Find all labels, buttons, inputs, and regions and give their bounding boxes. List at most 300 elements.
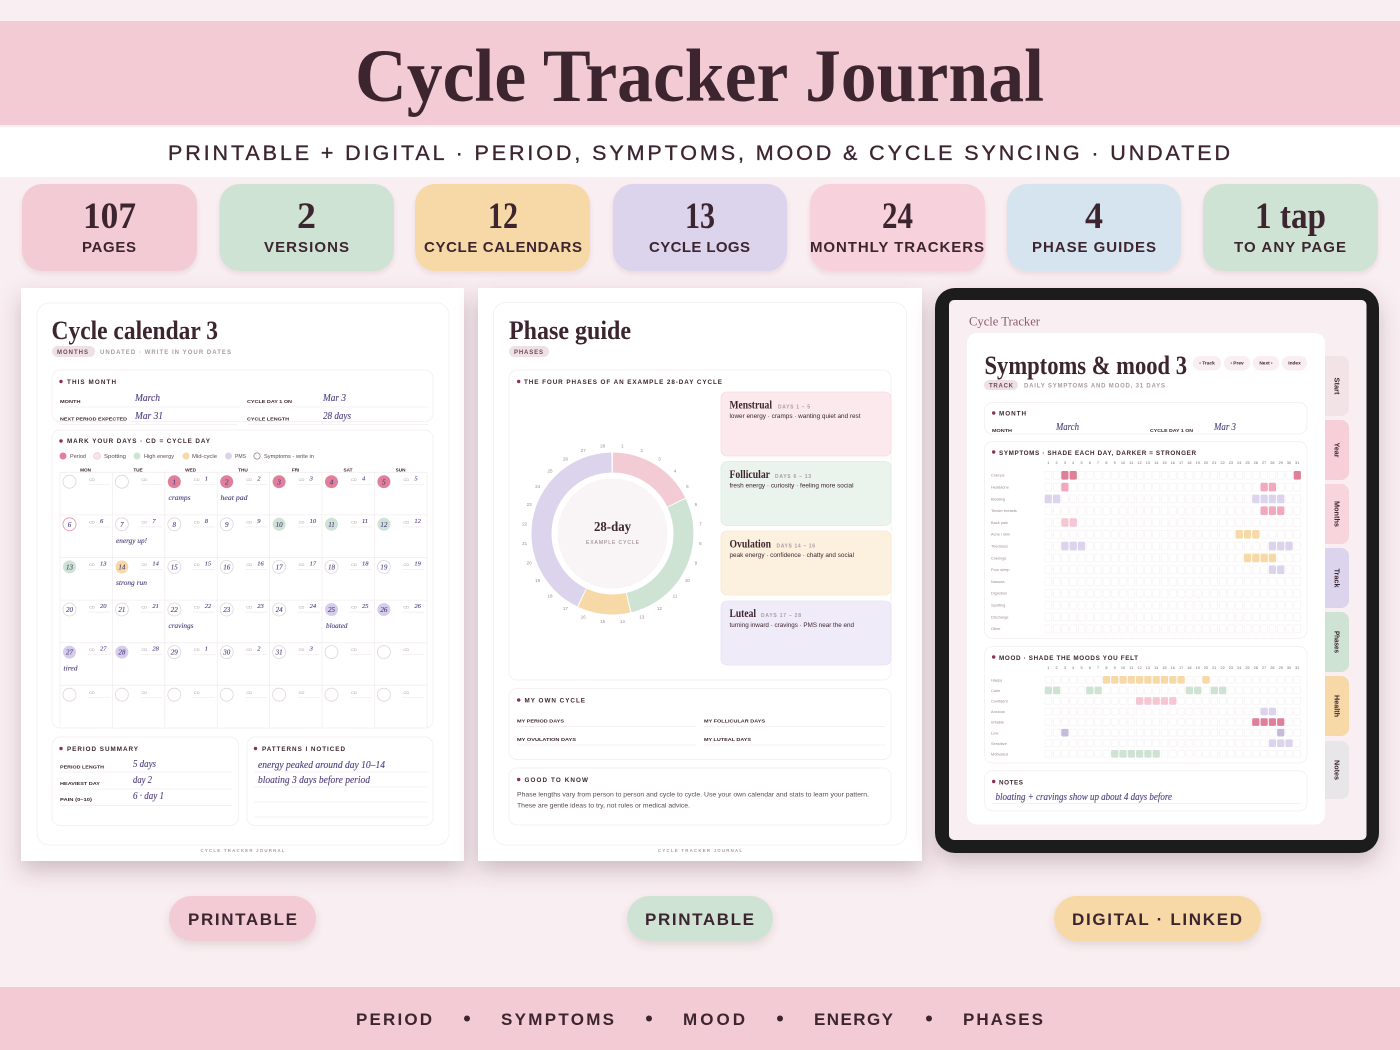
calendar week 3: CD — [141, 562, 147, 567]
calendar week 2: CD — [403, 519, 409, 524]
donut day labels: 20 — [527, 560, 532, 565]
calendar week 1: 1 — [205, 475, 208, 482]
side navigation tabs: Health — [1332, 695, 1340, 717]
panel: this month: March — [134, 393, 160, 404]
panel: notes: NOTES — [999, 780, 1023, 786]
calendar week 3: 14 — [152, 560, 160, 568]
panel: period summary: 6 · day 1 — [133, 791, 164, 802]
footer keywords: PERIOD — [356, 1010, 432, 1029]
donut day labels: 18 — [547, 594, 553, 599]
calendar week 2: 12 — [414, 518, 422, 525]
side navigation tabs: Year — [1332, 442, 1340, 458]
weekday headings: MON — [80, 468, 92, 472]
footer keywords — [356, 1010, 1043, 1029]
stat: 12 cycle calendars — [415, 184, 590, 271]
calendar legend: Mid-cycle — [192, 454, 217, 460]
calendar week 1: cramps — [168, 493, 191, 502]
panel: my own cycle — [509, 688, 891, 760]
calendar week 2: 11 — [362, 518, 368, 525]
panel: four phases — [509, 370, 891, 680]
symptoms day numbers: 8 — [1105, 461, 1107, 465]
calendar week 4: 24 — [276, 606, 283, 614]
mood day numbers: 14 — [1154, 666, 1158, 670]
calendar week 5: CD — [194, 647, 200, 652]
heading: symptoms and mood 3: Symptoms & mood 3 — [984, 351, 1187, 380]
symptoms row labels: Tender breasts — [991, 508, 1017, 513]
title band — [0, 21, 1400, 125]
tag: phases: PHASES — [514, 350, 543, 356]
calendar week 1: 4 — [362, 475, 366, 482]
panel: cycle calendar printable page — [21, 288, 464, 861]
calendar week 5: tired — [64, 664, 78, 672]
mood row labels: Happy — [991, 677, 1002, 682]
symptoms row labels: Back pain — [991, 520, 1008, 525]
calendar week 1: CD — [403, 477, 409, 482]
calendar week 4: 26 — [380, 606, 388, 614]
mood day numbers: 27 — [1262, 666, 1266, 670]
mood day numbers: 21 — [1212, 666, 1216, 670]
calendar week 5: CD — [89, 647, 95, 652]
stat: 24 monthly trackers — [810, 184, 985, 271]
pill: printable (phase guide) — [627, 896, 773, 941]
panel: this month: THIS MONTH — [67, 379, 116, 386]
calendar week 3: 14 — [118, 564, 126, 572]
panel: this month: MONTH — [60, 399, 81, 404]
donut day labels: 7 — [699, 521, 702, 526]
calendar week 2: 8 — [173, 521, 177, 529]
symptoms day numbers: 1 — [1047, 461, 1049, 465]
stat cards row — [22, 184, 1378, 271]
symptoms day numbers: 14 — [1154, 461, 1158, 465]
page footer: CYCLE TRACKER JOURNAL — [200, 848, 285, 853]
symptoms day numbers: 3 — [1064, 461, 1066, 465]
panel: good to know: GOOD TO KNOW — [524, 777, 588, 784]
symptoms row labels: Discharge — [991, 614, 1009, 619]
calendar week 1: 5 — [382, 478, 386, 486]
calendar legend: High energy — [144, 454, 174, 460]
stat: 13 cycle logs: CYCLE LOGS — [649, 239, 750, 256]
calendar week 1: heat pad — [220, 493, 248, 502]
calendar week 5: CD — [351, 647, 357, 652]
calendar week 6: CD — [194, 690, 200, 695]
calendar week 1: 3 — [309, 475, 314, 482]
phase card: menstrual: DAYS 1 – 5 — [778, 404, 810, 410]
mood day numbers: 3 — [1064, 666, 1066, 670]
title: Cycle Tracker Journal — [355, 35, 1044, 118]
panel: this month — [52, 370, 433, 424]
mood day numbers: 8 — [1105, 666, 1107, 670]
calendar week 3: 18 — [328, 564, 336, 572]
stat: 1 tap — [1203, 184, 1378, 271]
calendar week 3: CD — [246, 562, 252, 567]
stat: 2 versions: VERSIONS — [264, 239, 349, 256]
calendar week 5: 30 — [222, 649, 231, 657]
calendar week 1: 2 — [225, 478, 229, 486]
stat: 4 phase guides: 4 — [1085, 196, 1103, 237]
symptoms day numbers: 5 — [1080, 461, 1083, 465]
symptoms row labels: Cramps — [991, 473, 1005, 478]
mood day numbers: 5 — [1080, 666, 1083, 670]
stat: 12 cycle calendars: CYCLE CALENDARS — [424, 239, 582, 256]
symptoms row labels — [991, 473, 1017, 631]
navigation buttons: Index — [1288, 360, 1301, 366]
symptoms day numbers: 28 — [1270, 461, 1275, 465]
panel: good to know — [509, 768, 891, 825]
panel: four phases: THE FOUR PHASES OF AN EXAMPLE 28-DAY CYCLE — [524, 379, 722, 386]
calendar week 6: CD — [299, 690, 304, 695]
stat: 107 pages: PAGES — [82, 239, 136, 256]
calendar legend: Spotting — [104, 454, 126, 460]
symptoms day numbers: 22 — [1220, 461, 1225, 465]
mood day numbers: 1 — [1047, 666, 1049, 670]
calendar week 5: 28 — [118, 649, 126, 657]
mood day numbers: 25 — [1245, 666, 1250, 670]
calendar week 6: CD — [403, 690, 409, 695]
calendar week 2: 11 — [328, 521, 335, 529]
calendar week 6: CD — [89, 690, 95, 695]
side navigation tabs: Phases — [1332, 631, 1340, 653]
stat: 107 pages — [22, 184, 197, 271]
stat: 24 monthly trackers: 24 — [882, 196, 913, 237]
panel: period summary: PAIN (0–10) — [60, 797, 93, 802]
calendar week 3: 19 — [414, 560, 422, 568]
subheading: undated: UNDATED · WRITE IN YOUR DATES — [100, 350, 231, 356]
panel: patterns i noticed: energy peaked around day 10–14 — [258, 760, 386, 771]
stat: 107 pages: 107 — [83, 196, 136, 237]
calendar week 5: 28 — [152, 646, 160, 653]
mood day numbers: 29 — [1279, 666, 1283, 670]
donut day labels: 4 — [674, 469, 677, 474]
calendar legend: Period — [70, 454, 86, 460]
calendar week 4: CD — [403, 605, 409, 610]
side navigation tabs: Track — [1332, 568, 1340, 588]
calendar week 4: CD — [89, 605, 95, 610]
stat: 13 cycle logs — [613, 184, 787, 271]
calendar week 3: CD — [351, 562, 357, 567]
mood day numbers: 16 — [1171, 666, 1175, 670]
panel: month — [984, 402, 1307, 434]
calendar week 5: 29 — [171, 649, 178, 657]
tag: track — [984, 380, 1018, 390]
donut day labels: 15 — [600, 619, 606, 624]
weekday headings: FRI — [292, 468, 299, 472]
donut day labels: 9 — [695, 560, 698, 565]
symptoms row labels: Nausea — [991, 579, 1005, 584]
calendar week 1: 3 — [276, 478, 281, 486]
mood day numbers: 15 — [1162, 666, 1167, 670]
panel: period summary: PERIOD LENGTH — [60, 764, 105, 770]
phase card: follicular: DAYS 6 – 13 — [775, 474, 811, 480]
phase card: luteal — [721, 601, 891, 665]
calendar week 1: 5 — [414, 475, 418, 482]
calendar legend: PMS — [235, 454, 246, 460]
side navigation tabs: Months — [1332, 501, 1340, 527]
panel: mark your days calendar: MARK YOUR DAYS · CD = CYCLE DAY — [67, 438, 211, 445]
calendar week 5: CD — [141, 647, 147, 652]
donut chart: 28-day cycle — [522, 443, 702, 624]
donut day labels: 19 — [535, 578, 541, 583]
calendar week 6: CD — [141, 690, 147, 695]
mood day numbers: 17 — [1179, 666, 1183, 670]
mood day numbers: 7 — [1097, 666, 1099, 670]
symptoms day numbers: 4 — [1072, 461, 1074, 465]
symptoms day numbers: 12 — [1137, 461, 1142, 465]
phase card: menstrual: Menstrual — [730, 400, 772, 412]
calendar week 5 — [63, 646, 424, 672]
calendar week 3: 16 — [223, 564, 231, 572]
symptoms day numbers — [1047, 461, 1299, 465]
calendar week 2: energy up! — [116, 536, 147, 545]
calendar week 4: bloated — [326, 621, 348, 630]
calendar week 3: CD — [194, 562, 200, 567]
panel: this month: 28 days — [323, 411, 351, 422]
weekday headings: WED — [185, 468, 197, 472]
tag: phases — [509, 346, 549, 357]
symptoms row labels: Bloating — [991, 496, 1005, 501]
mood day numbers: 9 — [1114, 666, 1116, 670]
donut day labels: 5 — [686, 484, 689, 489]
calendar week 3: strong run — [116, 578, 147, 587]
calendar week 4: 22 — [205, 603, 212, 610]
side navigation tabs: Start — [1332, 378, 1340, 395]
symptoms day numbers: 18 — [1187, 461, 1192, 465]
symptoms day numbers: 19 — [1196, 461, 1200, 465]
calendar week 4: 23 — [257, 603, 264, 610]
symptoms day numbers: 7 — [1097, 461, 1099, 465]
symptoms row labels: Cravings — [991, 555, 1006, 560]
weekday headings — [80, 468, 406, 472]
donut day labels: 28 — [600, 443, 606, 448]
calendar legend — [60, 452, 314, 460]
symptoms day numbers: 24 — [1237, 461, 1241, 465]
calendar week 3: 17 — [310, 560, 317, 568]
symptoms day numbers: 2 — [1056, 461, 1058, 465]
donut day labels: 25 — [547, 469, 553, 474]
calendar week 1: CD — [89, 477, 95, 482]
panel: notes: bloating + cravings show up about 4 days before — [996, 792, 1172, 803]
panel: my own cycle: MY LUTEAL DAYS — [704, 737, 751, 742]
weekday headings: THU — [238, 468, 248, 472]
calendar week 3: CD — [403, 562, 409, 567]
calendar week 2: 10 — [276, 521, 283, 529]
tag: months — [52, 346, 95, 357]
calendar week 4: 22 — [171, 606, 178, 614]
donut day labels: 3 — [658, 456, 661, 461]
donut day labels: 14 — [620, 619, 625, 624]
donut day labels: 13 — [639, 615, 645, 620]
calendar week 6 — [63, 688, 424, 701]
pill: printable (calendar): PRINTABLE — [188, 910, 297, 929]
calendar week 4: 20 — [100, 603, 107, 610]
calendar week 2: 8 — [205, 518, 209, 525]
panel: mood grid — [984, 646, 1307, 763]
pill: printable (phase guide): PRINTABLE — [645, 910, 754, 929]
panel: symptoms grid: SYMPTOMS · SHADE EACH DAY, DARKER = STRONGER — [999, 450, 1196, 457]
mood day numbers: 24 — [1237, 666, 1241, 670]
calendar week 5: CD — [299, 647, 304, 652]
calendar week 3: 19 — [380, 564, 388, 572]
calendar week 4: 25 — [362, 603, 369, 610]
mood day numbers — [1047, 666, 1299, 670]
calendar week 1: CD — [351, 477, 357, 482]
calendar week 1: CD — [141, 477, 147, 482]
mood row labels: Anxious — [991, 709, 1005, 714]
calendar week 6: CD — [246, 690, 252, 695]
mood day numbers: 26 — [1254, 666, 1258, 670]
stat: 1 tap: TO ANY PAGE — [1234, 239, 1346, 256]
donut day labels: 2 — [640, 448, 643, 453]
symptoms row labels: Acne / skin — [991, 532, 1010, 537]
calendar week 4: 21 — [118, 606, 125, 614]
navigation buttons: Next › — [1259, 360, 1273, 366]
weekday headings: TUE — [133, 468, 143, 472]
mood day numbers: 4 — [1072, 666, 1074, 670]
subheading: daily symptoms: DAILY SYMPTOMS AND MOOD, 31 DAYS — [1024, 384, 1165, 390]
calendar week 4: 21 — [152, 603, 159, 610]
panel: phase guide printable page — [478, 288, 922, 861]
mood row labels — [991, 677, 1009, 756]
symptoms day numbers: 11 — [1129, 461, 1133, 465]
calendar week 3: 13 — [100, 560, 107, 568]
stat: 2 versions: 2 — [297, 196, 316, 237]
mood day numbers: 2 — [1056, 666, 1058, 670]
symptoms day numbers: 21 — [1212, 461, 1216, 465]
panel: period summary: HEAVIEST DAY — [60, 781, 101, 786]
calendar week 3: 18 — [362, 560, 369, 568]
calendar week 4: CD — [194, 605, 200, 610]
mood heat grid — [1045, 676, 1302, 760]
symptoms day numbers: 29 — [1279, 461, 1283, 465]
stat: 1 tap: 1 tap — [1255, 196, 1326, 237]
calendar week 4: 25 — [328, 606, 336, 614]
calendar week 3 — [63, 560, 424, 587]
calendar week 2: 9 — [225, 521, 229, 529]
symptoms day numbers: 10 — [1121, 461, 1125, 465]
phase card: luteal: DAYS 17 – 28 — [761, 613, 801, 619]
calendar week 2: CD — [141, 519, 147, 524]
calendar week 2: 7 — [152, 518, 156, 525]
calendar week 1 — [63, 475, 424, 502]
donut center label: 28-day — [594, 520, 631, 535]
donut day labels: 21 — [522, 541, 528, 546]
calendar week 4: 24 — [310, 603, 317, 610]
phase card: ovulation: peak energy · confidence · chatty and social — [730, 553, 854, 559]
donut day labels: 6 — [695, 502, 698, 507]
pill: digital linked — [1054, 896, 1261, 941]
calendar week 5: 3 — [309, 646, 314, 653]
phase card: luteal: Luteal — [730, 608, 756, 620]
calendar week 4: CD — [351, 605, 357, 610]
panel: my own cycle: MY PERIOD DAYS — [517, 718, 564, 724]
footer keywords: SYMPTOMS — [501, 1010, 614, 1029]
calendar legend: Symptoms - write in — [264, 454, 314, 460]
calendar week 4 — [63, 603, 424, 630]
calendar week 2: CD — [89, 519, 95, 524]
calendar week 4: CD — [141, 605, 147, 610]
mood row labels: Motivated — [991, 751, 1008, 756]
page footer: CYCLE TRACKER JOURNAL — [658, 848, 742, 853]
panel: month: March — [1055, 422, 1079, 433]
donut day labels: 26 — [563, 456, 568, 461]
donut day labels: 22 — [522, 521, 528, 526]
panel: month: Mar 3 — [1213, 422, 1236, 433]
calendar week 5: 2 — [257, 646, 261, 653]
mood day numbers: 11 — [1129, 666, 1133, 670]
side navigation tabs — [1315, 356, 1349, 799]
mood day numbers: 13 — [1146, 666, 1150, 670]
mood day numbers: 23 — [1229, 666, 1233, 670]
panel: period summary: PERIOD SUMMARY — [67, 746, 139, 753]
donut day labels: 17 — [563, 606, 568, 611]
weekday headings: SUN — [396, 468, 406, 472]
donut day labels: 8 — [699, 541, 702, 546]
calendar week 1: CD — [194, 477, 200, 482]
calendar week 1: 2 — [257, 475, 261, 482]
symptoms day numbers: 25 — [1245, 461, 1250, 465]
panel: this month: CYCLE LENGTH — [247, 416, 290, 422]
donut day labels: 27 — [581, 448, 586, 453]
panel: period summary — [52, 737, 238, 826]
panel: symptoms grid — [984, 442, 1307, 638]
calendar week 2: 9 — [257, 518, 261, 525]
donut day labels: 10 — [685, 578, 690, 583]
symptoms row labels: Other — [991, 626, 1001, 631]
symptoms day numbers: 13 — [1146, 461, 1150, 465]
calendar week 2: CD — [351, 519, 357, 524]
symptoms row labels: Digestion — [991, 591, 1007, 596]
mood day numbers: 19 — [1196, 666, 1200, 670]
donut day labels: 24 — [535, 484, 541, 489]
phase card: follicular — [721, 462, 891, 526]
calendar week 4: cravings — [168, 621, 194, 630]
calendar week 5: 1 — [205, 646, 208, 653]
calendar week 2: 10 — [310, 518, 317, 525]
panel: good to know: These are gentle ideas to try, not rules or medical advice. — [517, 802, 690, 810]
panel: digital tablet — [935, 288, 1379, 853]
panel: good to know: Phase lengths vary from person to person and cycle to cycle. Use your own calendar and stats to learn your pattern. — [517, 792, 869, 798]
stat: 2 versions — [220, 184, 394, 271]
donut center label — [586, 520, 640, 546]
tablet white sheet — [967, 333, 1325, 824]
symptoms day numbers: 17 — [1179, 461, 1183, 465]
weekday headings: SAT — [343, 468, 353, 472]
mood day numbers: 30 — [1287, 666, 1291, 670]
symptoms day numbers: 27 — [1262, 461, 1266, 465]
calendar week 3: 16 — [257, 560, 264, 568]
calendar week 2: CD — [194, 519, 200, 524]
calendar week 2: 6 — [100, 518, 104, 525]
calendar week 1: 1 — [173, 478, 176, 486]
panel: my own cycle: MY FOLLICULAR DAYS — [704, 718, 765, 724]
footer keywords: MOOD — [683, 1010, 745, 1029]
calendar week 5: CD — [246, 647, 252, 652]
calendar week 2: CD — [246, 519, 252, 524]
panel: this month: NEXT PERIOD EXPECTED — [60, 416, 128, 422]
calendar week 2: CD — [299, 519, 304, 524]
phase card: menstrual: lower energy · cramps · wanting quiet and rest — [730, 414, 861, 420]
symptoms day numbers: 9 — [1114, 461, 1116, 465]
tag: months: MONTHS — [57, 350, 88, 356]
calendar week 3: 13 — [66, 564, 74, 572]
panel: my own cycle: MY OVULATION DAYS — [517, 737, 576, 742]
heading: phase guide: Phase guide — [509, 316, 631, 345]
calendar week 2: 7 — [120, 521, 124, 529]
heading: cycle calendar 3: Cycle calendar 3 — [52, 316, 218, 345]
calendar week 4: 23 — [223, 606, 231, 614]
panel: my own cycle: MY OWN CYCLE — [524, 698, 585, 704]
donut day labels: 23 — [527, 502, 532, 507]
panel: period summary: day 2 — [133, 775, 152, 786]
